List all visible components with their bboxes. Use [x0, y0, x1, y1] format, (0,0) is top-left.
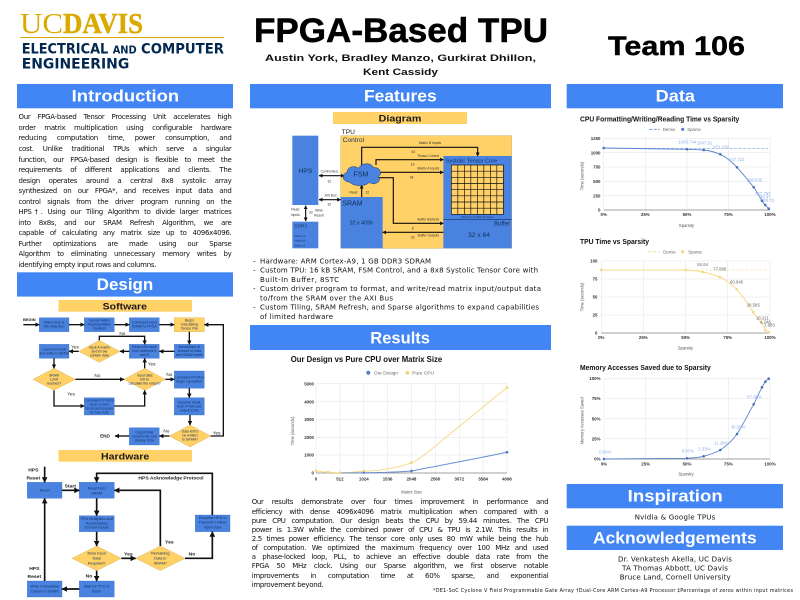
flowchart: hardware: Transmit Further — [199, 521, 227, 525]
flowchart: software: SRAM — [49, 373, 59, 377]
architecture diagram: Buffer Address — [417, 218, 440, 222]
chart: memory accesses saved: 25% — [641, 461, 650, 466]
flowchart: software: No — [166, 372, 173, 377]
flowchart: software: No — [163, 428, 170, 433]
flowchart: hardware: HPS — [28, 467, 39, 473]
heading: acknowledgements: Acknowledgements — [593, 529, 757, 547]
flowchart: software: and B row — [91, 350, 108, 354]
flowchart: software: No — [119, 331, 126, 336]
architecture diagram: 32 — [411, 235, 415, 239]
chart: CPU time vs sparsity: 1047.92 — [697, 140, 713, 145]
flowchart: software: result to file and — [132, 434, 157, 438]
chart: our design vs pure CPU: Our Design vs Pure CPU over Matrix Size — [291, 354, 443, 364]
heading: inspiration — [567, 484, 783, 508]
chart: our design vs pure CPU: 0 — [312, 471, 315, 476]
heading: introduction: Introduction — [72, 88, 179, 106]
chart: our design vs pure CPU: 1536 — [383, 476, 393, 481]
chart: CPU time vs sparsity: 1060.744 — [678, 139, 697, 144]
chart: TPU time vs sparsity: Dense — [663, 249, 676, 254]
flowchart: hardware: Read from — [88, 486, 106, 490]
architecture diagram: Matrix B — [294, 239, 305, 243]
chart: CPU time vs sparsity: Dense — [663, 127, 676, 132]
architecture diagram: Systolic Tensor Core — [446, 159, 497, 165]
introduction text — [18, 113, 232, 269]
flowchart: software: Data left to — [182, 429, 198, 433]
flowchart: software: begin calculation — [176, 379, 202, 383]
chart: our design vs pure CPU: 2048 — [407, 476, 417, 481]
heading: data — [567, 84, 783, 108]
chart: our design vs pure CPU: 4000 — [304, 399, 315, 404]
results text: power is 1.3W while the combined power of CPU & TPU is 2.1W. This results in — [252, 526, 548, 534]
flowchart: software: BEGIN — [23, 317, 36, 322]
flowchart: software: Yes — [213, 431, 221, 436]
architecture diagram: Read — [291, 208, 299, 212]
title: FPGA-Based TPU — [254, 12, 548, 50]
acknowledgements text: Bruce Land, Cornell University — [620, 572, 731, 581]
chart: TPU time vs sparsity: Sparsity — [678, 346, 694, 350]
chart: memory accesses saved: Memory Accesses Saved due to Sparsity — [580, 363, 712, 372]
introduction text: identifying empty input rows and columns. — [18, 261, 156, 269]
chart: memory accesses saved: 50% — [592, 416, 601, 421]
flowchart: software: left to — [140, 377, 149, 381]
flowchart: software: SRAM to FPGA — [132, 325, 157, 329]
architecture diagram: Matrix C — [294, 243, 306, 247]
introduction text: Algorithm to eliminating unnecessary memory writes by — [18, 250, 232, 258]
chart: TPU time vs sparsity: Time (seconds) — [580, 282, 584, 311]
flowchart: software: Breakdown of — [179, 345, 200, 349]
architecture diagram: 6 — [412, 227, 414, 231]
heading: design: Design — [97, 276, 153, 294]
introduction text: order matrix multiplication using configurable hardware — [18, 124, 232, 132]
chart: CPU time vs sparsity: 100% — [764, 212, 776, 217]
architecture diagram: HPS — [298, 168, 313, 175]
results text — [252, 498, 548, 589]
architecture diagram: TPU — [342, 129, 355, 136]
flowchart: hardware: SRAM — [91, 491, 102, 495]
chart: memory accesses saved: 67.88% — [747, 394, 762, 399]
architecture diagram: Tensor Control — [418, 154, 439, 158]
chart: our design vs pure CPU: 1024 — [359, 476, 369, 481]
introduction text: capable of calculating any matrix size up to 4096x4096. — [18, 229, 232, 237]
features list: Custom Tiling, SRAM Refresh, and Sparse algorithms to expand capabilities — [260, 304, 539, 312]
chart: CPU time vs sparsity: 747.722 — [729, 157, 745, 162]
chart: TPU time vs sparsity: Sparse — [688, 249, 703, 254]
chart: CPU time vs sparsity: Time (seconds) — [580, 161, 584, 190]
features list — [253, 257, 541, 321]
features list: Hardware: ARM Cortex-A9, 1 GB DDR3 SDRAM — [260, 257, 431, 265]
architecture diagram: Control — [343, 137, 365, 144]
acknowledgements text: Dr. Venkatesh Akella, UC Davis — [618, 554, 732, 563]
introduction text: requirements of different applications and clients. The — [18, 166, 232, 174]
flowchart: hardware: HPS Acknowledge Protocol — [138, 476, 204, 482]
flowchart: software: and write to SRAM — [39, 351, 69, 355]
subheading: software — [58, 300, 192, 312]
architecture diagram: SRAM — [342, 200, 363, 207]
chart: CPU time vs sparsity: CPU Formatting/Writing/Reading Time vs Sparsity — [580, 114, 740, 123]
heading: features: Features — [364, 88, 437, 106]
heading: design — [17, 272, 233, 297]
flowchart: hardware: SRAM? — [154, 562, 167, 566]
authors — [265, 53, 536, 78]
results text: a phase-locked loop, PLL, to achieve an effective double data rate from the — [252, 553, 548, 561]
flowchart: software: display Total — [135, 438, 154, 442]
logo: UC Davis Electrical and Computer Engineering: UC — [20, 8, 63, 40]
architecture diagram: Matrix A Inputs — [417, 167, 440, 171]
chart: memory accesses saved: 0% — [594, 457, 601, 462]
flowchart: software: and SRAM writes — [176, 353, 203, 357]
flowchart: hardware: Output to SRAM — [31, 589, 59, 593]
flowchart: hardware: HPS — [29, 566, 40, 572]
architecture diagram: Result — [314, 214, 324, 218]
chart: memory accesses saved — [580, 363, 776, 476]
results text: improvement beyond. — [252, 581, 323, 589]
chart: CPU time vs sparsity: 88.47 — [760, 194, 771, 200]
flowchart: software: Begin — [185, 318, 194, 322]
flowchart: hardware: Current Inputs — [85, 526, 109, 530]
introduction text: Further optimizations are made using our Sparse — [18, 240, 232, 248]
authors: Kent Cassidy — [363, 67, 439, 78]
chart: CPU time vs sparsity: 167.767 — [755, 191, 771, 196]
flowchart: software: from FPGA and — [177, 404, 201, 408]
flowchart: hardware: Required? — [88, 562, 106, 566]
chart: CPU time vs sparsity: 750 — [593, 165, 601, 170]
subheading: software: Software — [103, 301, 147, 312]
flowchart: software: No — [94, 373, 101, 378]
subheading: hardware: Hardware — [101, 452, 149, 463]
flowchart: software: Command FPGA to — [174, 375, 204, 379]
architecture diagram: Buffer — [494, 222, 510, 228]
architecture diagram: 10 — [411, 162, 415, 166]
chart: memory accesses saved: 0% — [601, 461, 607, 466]
architecture diagram: 32 — [327, 203, 331, 207]
chart: our design vs pure CPU: 2560 — [431, 476, 441, 481]
introduction text: HPS†. Using our Tiling Algorithm to divide larger matrices — [18, 208, 232, 216]
flowchart: software: amount of data — [178, 349, 201, 353]
flowchart: hardware: Yes — [124, 552, 133, 558]
introduction text: reducing computation time, power consumption, and — [18, 134, 232, 142]
architecture diagram: 32 — [327, 179, 331, 183]
flowchart: software: Command Input — [132, 321, 157, 325]
flowchart: software: calculate the output? — [129, 381, 161, 385]
flowchart: software: Read next input — [132, 345, 157, 349]
chart: memory accesses saved: Memory Accesses Saved — [580, 397, 584, 444]
logo: UC Davis Electrical and Computer Engineering: AND — [113, 44, 137, 56]
chart: CPU time vs sparsity: 0% — [601, 212, 607, 217]
heading: results: Results — [370, 329, 430, 347]
chart: our design vs pure CPU: 2000 — [304, 435, 315, 440]
flowchart: hardware: Wait for TPU to — [84, 585, 110, 589]
chart: TPU time vs sparsity: 18.211 — [756, 316, 769, 321]
flowchart: software: Creation — [93, 326, 106, 330]
flowchart: hardware: Request HPS to — [199, 516, 226, 520]
flowchart: software: Load next block — [42, 347, 66, 351]
logo: UC Davis Electrical and Computer Engineering: COMPUTER — [141, 41, 224, 57]
chart: CPU time vs sparsity: Sparse — [687, 127, 702, 132]
results text: FPGA 50 MHz clock. Using our Sparse algorithm, we first observe notable — [252, 562, 548, 570]
architecture diagram: Read — [349, 191, 357, 195]
results text: efficiency with dense 4096x4096 matrix multiplication when compared with a — [252, 508, 548, 516]
chart: our design vs pure CPU: 1000 — [304, 453, 315, 458]
architecture diagram: Buffer Outputs — [418, 234, 439, 238]
flowchart: hardware: Reset — [28, 574, 41, 580]
logo: UC Davis Electrical and Computer Engineering: DAVIS — [63, 8, 143, 40]
flowchart: hardware: Input Data — [204, 525, 222, 529]
architecture diagram: Control Bus — [321, 170, 338, 174]
flowchart: software: Output final — [135, 430, 153, 434]
flowchart: software: and B — [140, 353, 150, 357]
flowchart: software: Receive result — [178, 400, 200, 404]
chart: CPU time vs sparsity: 25% — [641, 212, 650, 217]
team number: Team 106 — [608, 31, 745, 61]
features list: - — [253, 285, 256, 293]
chart: our design vs pure CPU: 3072 — [454, 476, 465, 481]
results text: 2.5 times power efficiency. The tensor core only uses 80 mW while being the hub — [252, 535, 548, 543]
introduction text: into 8x8s, and our SRAM Refresh Algorithm, we are — [18, 219, 232, 227]
flowchart: software: contain data — [90, 354, 109, 358]
chart: CPU time vs sparsity: 250 — [593, 193, 601, 198]
chart: CPU time vs sparsity: 500 — [593, 179, 601, 184]
results text: pure CPU computation. Our design beats the CPU by 59.44 minutes. The CPU — [252, 517, 548, 525]
features list: of limited hardware — [260, 313, 333, 321]
introduction text: cost. Unlike traditional TPUs which serve a singular — [18, 145, 232, 153]
chart: CPU time vs sparsity: 971.108 — [713, 145, 729, 150]
logo: UC Davis Electrical and Computer Engineering: ELECTRICAL — [22, 41, 108, 57]
heading: inspiration: Inspiration — [628, 488, 723, 506]
chart: memory accesses saved: 3.33% — [698, 446, 711, 451]
subheading: diagram: Diagram — [379, 114, 421, 125]
flowchart: software: block and prepare — [85, 406, 113, 410]
introduction text: Our FPGA-based Tensor Processing Unit accelerates high — [18, 113, 232, 121]
results text: of computation. We optimized the maximum frequency over 100 MHz and used — [252, 544, 548, 552]
architecture diagram: Matrices of MAC Modules — [461, 215, 494, 219]
features list: Custom driver program to format, and write/read matrix input/output data — [260, 285, 541, 293]
chart: TPU time vs sparsity: 25 — [593, 313, 598, 318]
chart: our design vs pure CPU: 4096 — [502, 476, 512, 481]
chart: our design vs pure CPU — [290, 354, 512, 494]
flowchart: software: from Matrices A — [132, 349, 157, 353]
chart: our design vs pure CPU: 3584 — [478, 476, 489, 481]
architecture diagram: DDR3 — [294, 223, 307, 228]
chart: TPU time vs sparsity — [580, 237, 776, 350]
flowchart: software: reached? — [47, 381, 61, 385]
features list: - — [253, 304, 256, 312]
architecture diagram: 64 — [410, 175, 414, 179]
chart: TPU time vs sparsity: 25% — [639, 335, 648, 340]
architecture diagram: 32 — [365, 191, 369, 195]
architecture diagram: 32 x 64 — [468, 232, 490, 239]
flowchart: software: Yes — [71, 345, 79, 350]
subheading: diagram — [333, 112, 467, 125]
results text: Our results demonstrate over four times improvement in performance and — [252, 498, 548, 506]
chart: CPU time vs sparsity: 1250 — [591, 136, 601, 141]
chart: TPU time vs sparsity: 77.806 — [713, 267, 727, 272]
chart: TPU time vs sparsity: 100 — [590, 259, 598, 264]
chart: our design vs pure CPU: 512 — [336, 476, 344, 481]
chart: TPU time vs sparsity: 75% — [723, 335, 732, 340]
flowchart: hardware: No — [189, 552, 195, 558]
heading: introduction — [17, 84, 233, 108]
flowchart: hardware: Start — [65, 483, 76, 489]
logo: UC Davis Electrical and Computer Engineering — [20, 8, 224, 73]
features list: Custom TPU: 16 kB SRAM, FSM Control, and a 8x8 Systolic Tensor Core with — [260, 267, 538, 275]
heading: acknowledgements — [567, 526, 783, 550]
chart: memory accesses saved: 11.28% — [714, 440, 728, 445]
flowchart: software: Tensor File — [181, 326, 198, 330]
architecture diagram: 64 — [411, 150, 415, 154]
inspiration text: Nvidia & Google TPUs — [635, 514, 716, 522]
chart: our design vs pure CPU: Matrix Size — [401, 490, 423, 494]
chart: memory accesses saved: 75% — [724, 461, 733, 466]
chart: memory accesses saved: 0.87% — [682, 449, 694, 454]
introduction text: function, our FPGA-based design is flexible to meet the — [18, 156, 232, 164]
flowchart: software: Limit — [50, 377, 58, 381]
chart: CPU time vs sparsity: 28.72 — [763, 198, 775, 203]
chart: our design vs pure CPU: Time (seconds) — [290, 416, 295, 445]
chart: our design vs pure CPU: 3000 — [304, 417, 315, 422]
chart: TPU time vs sparsity: 50 — [593, 295, 598, 300]
flowchart: software: Sparse Matrix — [89, 318, 110, 322]
authors: Austin York, Bradley Manzo, Gurkirat Dhillon, — [265, 53, 536, 64]
chart: TPU time vs sparsity: 1.983 — [764, 322, 775, 327]
flowchart: hardware: Data — [93, 557, 102, 561]
chart: CPU time vs sparsity: 0 — [598, 208, 601, 213]
flowchart: hardware: Yes — [165, 539, 174, 545]
flowchart: software: clear current — [90, 402, 109, 406]
chart: TPU time vs sparsity: 60.945 — [730, 279, 744, 284]
introduction text: synthesized on our FPGA*, and receives input data and — [18, 187, 232, 195]
chart: memory accesses saved: Sparsity — [678, 472, 694, 476]
flowchart: software: Input data — [137, 373, 152, 377]
chart: TPU time vs sparsity: 28.585 — [747, 303, 760, 308]
chart: TPU time vs sparsity: 4.246 — [760, 320, 771, 325]
architecture diagram: 32 — [309, 211, 313, 215]
results text: improvements in computation time at 60% sparse, and exponential — [252, 572, 548, 580]
architecture diagram: 32 x 4096 — [350, 220, 373, 226]
chart: TPU time vs sparsity: 0 — [595, 331, 598, 336]
chart: memory accesses saved: 75% — [592, 396, 601, 401]
chart: memory accesses saved: 25% — [592, 436, 601, 441]
chart: CPU time vs sparsity: 1000 — [591, 150, 601, 155]
flowchart: software: END — [100, 434, 111, 439]
chart: memory accesses saved: 100% — [764, 461, 776, 466]
chart: CPU time vs sparsity: Sparsity — [679, 223, 695, 228]
chart: our design vs pure CPU: Our Design — [374, 370, 399, 375]
flowchart: hardware: TPU Multiplies and — [81, 517, 113, 521]
architecture diagram: Inputs — [291, 213, 300, 217]
chart: TPU time vs sparsity: 75 — [593, 277, 598, 282]
chart: TPU time vs sparsity: 0% — [598, 335, 605, 340]
flowchart: hardware: More Input — [88, 552, 107, 556]
chart: CPU time vs sparsity: 75% — [724, 212, 733, 217]
chart: our design vs pure CPU: Pure CPU — [412, 370, 434, 375]
flowchart: software: File Selection — [44, 325, 65, 329]
flowchart: software: be written — [182, 433, 198, 437]
features list: - — [253, 267, 256, 275]
chart: TPU time vs sparsity: TPU Time vs Sparsity — [580, 237, 650, 246]
flowchart: software: Calculating — [181, 322, 198, 326]
architecture diagram: AXI Bus — [325, 194, 337, 198]
chart: memory accesses saved: 50% — [683, 461, 691, 466]
flowchart: hardware: Reset — [40, 489, 51, 493]
chart: memory accesses saved: 100% — [589, 376, 601, 381]
chart: memory accesses saved: 30.93% — [731, 424, 745, 429]
flowchart: hardware: No — [86, 574, 92, 580]
chart: our design vs pure CPU: 0 — [315, 476, 318, 481]
features list: - — [253, 257, 256, 265]
flowchart: hardware: Write Cumulative — [30, 585, 59, 589]
flowchart: software: Yes — [67, 392, 75, 397]
flowchart: software: for new data — [90, 410, 109, 414]
chart: memory accesses saved: 0.00% — [599, 449, 612, 454]
flowchart: software: Matrix Size & — [44, 321, 65, 325]
architecture diagram: Matrix B Inputs — [419, 141, 441, 145]
architecture diagram — [291, 129, 512, 248]
features list: Built-In Buffer, 8STC — [260, 276, 339, 284]
logo: UC Davis Electrical and Computer Engineering: ENGINEERING — [22, 57, 129, 73]
chart: CPU time vs sparsity — [580, 114, 776, 228]
chart: TPU time vs sparsity: 84.64 — [697, 262, 709, 267]
flowchart: software — [23, 317, 223, 447]
flowchart: software: Representation — [88, 322, 111, 326]
acknowledgements text: TA Thomas Abbott, UC Davis — [621, 563, 728, 572]
heading: data: Data — [656, 88, 696, 106]
flowchart: hardware: Reset — [27, 476, 40, 482]
flowchart: software: Command FPGA to — [84, 398, 114, 402]
chart: CPU time vs sparsity: 50% — [683, 212, 691, 217]
flowchart: hardware: Remaining — [151, 552, 169, 556]
introduction text: control signals from the driver program running on the — [18, 198, 232, 206]
heading: features — [250, 84, 551, 108]
architecture diagram: Matrix A — [294, 234, 305, 238]
heading: results — [250, 325, 551, 350]
chart: TPU time vs sparsity: 50% — [681, 335, 690, 340]
subheading: hardware — [58, 450, 192, 463]
footnotes: *DE1-SoC Cyclone V Field Programmable Gate Array †Dual-Core ARM Cortex-A9 Processor ‡Percentage of zeros within input matrices — [433, 588, 793, 594]
chart: our design vs pure CPU: 5000 — [304, 381, 315, 386]
flowchart: software: Yes — [148, 362, 156, 367]
flowchart: hardware: finish — [92, 589, 101, 593]
flowchart: software: output to file — [180, 408, 199, 412]
features list: to/from the SRAM over the AXI Bus — [260, 294, 393, 302]
architecture diagram: FSM — [354, 172, 369, 179]
acknowledgements text — [618, 554, 732, 581]
chart: TPU time vs sparsity: 100% — [764, 335, 776, 340]
flowchart: hardware: Data in — [154, 557, 166, 561]
flowchart: hardware: Accumulates — [86, 521, 108, 525]
flowchart: hardware — [27, 467, 230, 597]
flowchart: software: Input A matrix — [89, 346, 110, 350]
chart: CPU time vs sparsity: 398.835 — [747, 177, 763, 182]
architecture diagram: Write — [315, 208, 323, 212]
flowchart: software: to SRAM? — [182, 437, 198, 441]
introduction text: design operates around a central 8x8 systolic array — [18, 177, 232, 185]
